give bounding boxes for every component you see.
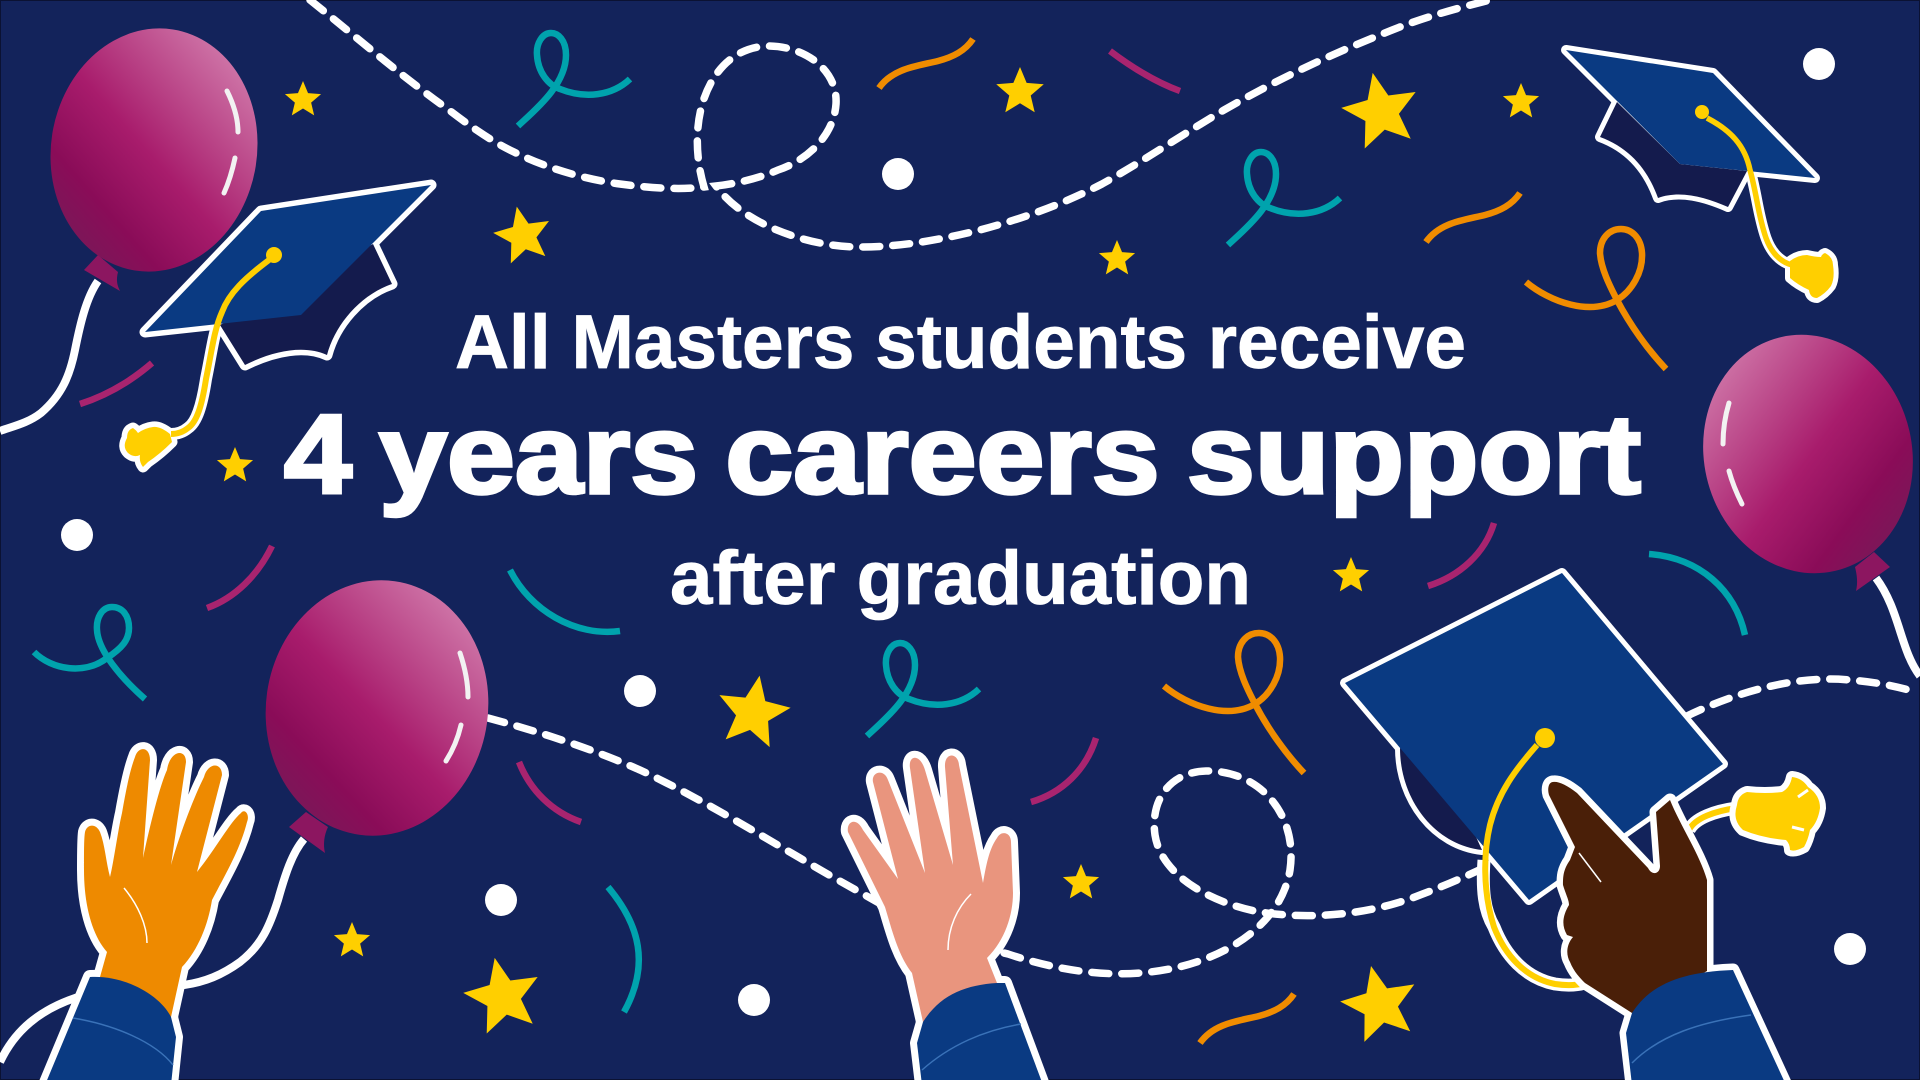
line 2: 4 years careers support (284, 392, 1641, 517)
tassel (1689, 808, 1737, 830)
balloon: lower left (0, 566, 505, 1062)
balloon: right (1680, 314, 1920, 676)
dashed path: bottom (488, 679, 1912, 974)
sleeve (917, 983, 1043, 1080)
line 1: All Masters students receive (455, 300, 1466, 385)
teal loop ribbons (34, 33, 1340, 736)
teal arcs (510, 554, 1745, 1012)
graduation cap: top left (125, 185, 431, 467)
orange loop ribbons (879, 39, 1666, 1043)
yellow stars (217, 65, 1539, 1045)
hand: orange, left (45, 749, 248, 1080)
tassel (125, 427, 172, 467)
balloon: top left (0, 13, 275, 431)
line 3: after graduation (670, 536, 1251, 621)
graduation cap: lower right (1345, 573, 1820, 985)
dashed path: top (310, 0, 1490, 247)
magenta arcs (80, 51, 1494, 822)
graduation cap: top right (1566, 50, 1834, 298)
headline (284, 300, 1641, 621)
sleeve (1626, 970, 1786, 1080)
hand: peach, centre (848, 755, 1043, 1080)
tassel (1790, 253, 1834, 298)
hand: dark, holding cap (1548, 782, 1786, 1080)
sleeve (45, 977, 176, 1080)
